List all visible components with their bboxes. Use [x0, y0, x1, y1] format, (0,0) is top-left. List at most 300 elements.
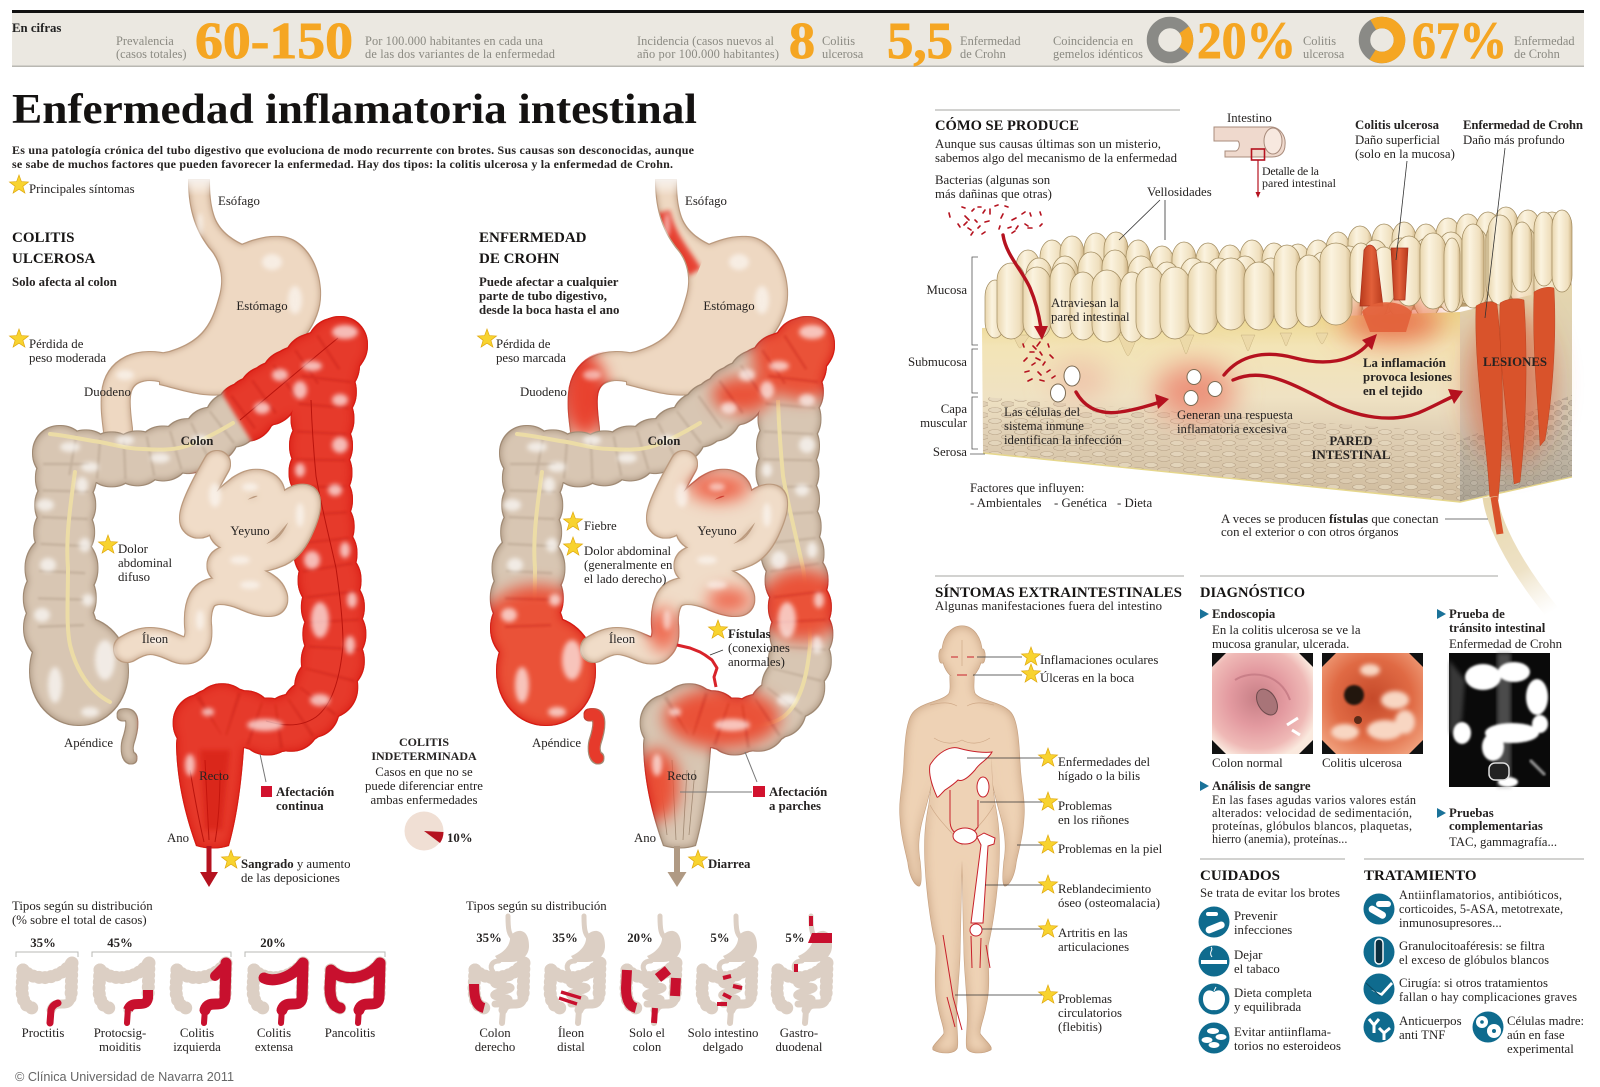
mini: colon derecho [474, 916, 529, 1023]
symptom: dolor abdominal [564, 537, 673, 586]
organ labels [520, 194, 755, 845]
crohn depth label: Daño más profundo [1463, 133, 1565, 147]
symptom: perdida de peso: Pérdida de [496, 337, 551, 351]
percentages: 35% [476, 931, 502, 945]
heading: CÓMO SE PRODUCE [935, 117, 1079, 134]
colitis depth label: (solo en la mucosa) [1355, 147, 1455, 161]
item: celulas madre: Células madre: [1507, 1014, 1584, 1028]
symptom: dolor abdominal: Dolor [118, 542, 149, 556]
heading [371, 735, 477, 763]
image captions: Colon normal [1212, 756, 1283, 770]
panel: como se produce [908, 110, 1583, 612]
image: colon normal [1212, 653, 1313, 754]
layer labels: Submucosa [908, 355, 967, 369]
item: evitar: torios no esteroideos [1234, 1039, 1341, 1053]
bacteria label [935, 173, 1052, 201]
factors: - Genética [1054, 496, 1107, 510]
captions: moiditis [99, 1040, 141, 1054]
description: Casos en que no se [375, 765, 473, 779]
crypts [1012, 333, 1328, 356]
icon: apple [1198, 984, 1230, 1014]
header band: en cifras [12, 10, 1584, 70]
heading: colitis ulcerosa: ULCEROSA [12, 251, 96, 267]
item: celulas madre [1507, 1014, 1584, 1056]
symptom: fiebre [564, 512, 617, 533]
organ labels: Íleon [142, 632, 169, 646]
analisis de sangre: alterados: velocidad de sedimentación, [1212, 806, 1412, 820]
prevalence label: (casos totales) [116, 47, 187, 61]
label enfermedad de crohn: de Crohn [1514, 47, 1560, 61]
symptom: dolor abdominal: Dolor abdominal [584, 544, 672, 558]
step labels: provoca lesiones [1363, 370, 1452, 384]
organ labels: Esófago [685, 194, 727, 208]
incidence label: año por 100.000 habitantes) [637, 47, 779, 61]
captions: Solo el [629, 1026, 665, 1040]
step labels: La inflamación [1363, 356, 1446, 370]
heading: CUIDADOS [1200, 868, 1280, 884]
analisis de sangre: En las fases agudas varios valores están [1212, 793, 1416, 807]
arrow: cells respond [1076, 392, 1169, 413]
arrow: to deep tissue [1233, 375, 1463, 418]
item: oseo: óseo (osteomalacia) [1058, 896, 1160, 910]
symptom: perdida de peso: Pérdida de [29, 337, 84, 351]
analisis de sangre: Análisis de sangre [1212, 779, 1311, 793]
mini: proctitis [22, 963, 72, 1023]
organ labels: Íleon [609, 632, 636, 646]
item: piel [1038, 835, 1163, 856]
symptom: dolor abdominal: abdominal [118, 556, 172, 570]
pruebas complementarias: TAC, gammagrafía... [1449, 835, 1557, 849]
item: prevenir: Prevenir [1234, 909, 1278, 923]
label colitis ulcerosa: Colitis [822, 34, 855, 48]
subtitle: Puede afectar a cualquier [479, 275, 619, 289]
step labels: inflamatoria excesiva [1177, 422, 1287, 436]
item: antiinflamatorios [1399, 888, 1563, 930]
step labels: sistema inmune [1004, 419, 1084, 433]
mini: colitis izquierda [176, 963, 226, 1023]
mini: gastroduodenal [777, 916, 832, 1023]
callout: afectacion a parches: a parches [769, 799, 821, 813]
percentages: 35% [30, 936, 56, 950]
prevalence label: Prevalencia [116, 34, 174, 48]
symptom: dolor abdominal: (generalmente en [584, 558, 673, 572]
panel: tipos colitis [12, 899, 385, 1054]
number 60-150: 60-150 [195, 13, 353, 70]
layer brackets [970, 257, 985, 454]
factors [970, 481, 1152, 510]
layer labels: Mucosa [926, 283, 967, 297]
organ labels: Esófago [218, 194, 260, 208]
step labels: Generan una respuesta [1177, 408, 1293, 422]
percentages: 20% [260, 936, 286, 950]
organ labels: Ano [634, 831, 656, 845]
item: dieta [1234, 986, 1312, 1014]
symptom: dolor abdominal: difuso [118, 570, 150, 584]
fistula note: con el exterior o con otros órganos [1221, 525, 1398, 539]
intestinal wall block [982, 207, 1572, 612]
label colitis ulcerosa [1303, 34, 1345, 61]
panel: tipos crohn [466, 899, 832, 1054]
caption [12, 899, 153, 927]
bacteria label: más dañinas que otras) [935, 187, 1052, 201]
intro text [12, 143, 695, 171]
item: antiinflamatorios: corticoides, 5-ASA, metotrexate, [1399, 902, 1563, 916]
donut 20% [1146, 16, 1194, 64]
item: anticuerpos: Anticuerpos [1399, 1014, 1462, 1028]
step labels: en el tejido [1363, 384, 1423, 398]
item: circulatorios [1038, 985, 1122, 1034]
intestine detail icon: pared intestinal [1262, 176, 1337, 190]
section rule [1200, 575, 1498, 577]
pruebas complementarias: Pruebas [1449, 806, 1494, 820]
item: boca [1022, 664, 1134, 685]
layer labels: muscular [920, 416, 968, 430]
facial features [951, 657, 974, 675]
layer labels: Capa [941, 402, 967, 416]
heading: INDETERMINADA [371, 749, 477, 763]
analisis de sangre [1200, 779, 1416, 846]
number 8: 8 [789, 13, 815, 70]
organ labels: Ano [167, 831, 189, 845]
symptom: dolor abdominal: el lado derecho) [584, 572, 666, 586]
intestine detail icon: Intestino [1227, 111, 1272, 125]
image captions: Colitis ulcerosa [1322, 756, 1402, 770]
subtitle: parte de tubo digestivo, [479, 289, 607, 303]
panel: enfermedad de crohn [478, 176, 834, 887]
symptom: diarrea: Diarrea [708, 857, 751, 871]
intro text: se sabe de muchos factores que pueden favorecer la enfermedad. Hay dos tipos: la colitis ulcerosa y la enfermedad de Crohn. [12, 157, 673, 171]
icon: stem cells [1472, 1012, 1504, 1042]
organ labels: Recto [199, 769, 229, 783]
label enfermedad de crohn: de Crohn [960, 47, 1006, 61]
inflammation glows [1052, 302, 1552, 463]
callout: afectacion a parches: Afectación [769, 785, 827, 799]
arrow: diarrhea [668, 846, 686, 887]
item: anticuerpos [1399, 1014, 1462, 1042]
organ labels: Apéndice [64, 736, 113, 750]
prueba de transito: Prueba de [1449, 607, 1505, 621]
intro: Aunque sus causas últimas son un misterio, [935, 137, 1161, 151]
section rule [1364, 858, 1584, 860]
item: dieta: Dieta completa [1234, 986, 1312, 1000]
symptom: fistulas: anormales) [728, 655, 785, 669]
section rule [935, 575, 1184, 577]
callout: afectacion a parches [680, 752, 827, 813]
endoscopia text [1200, 607, 1361, 651]
item: cirugia: Cirugía: si otros tratamientos [1399, 976, 1548, 990]
organ labels: Duodeno [520, 385, 567, 399]
mini: pancolitis [330, 963, 380, 1023]
callout: afectacion continua: Afectación [276, 785, 334, 799]
percentages: 5% [710, 931, 730, 945]
captions: Protocsig- [94, 1026, 146, 1040]
percentages: 45% [107, 936, 133, 950]
pie chart 10% [404, 812, 444, 850]
number 5,5: 5,5 [887, 13, 953, 70]
item: celulas madre: aún en fase [1507, 1028, 1565, 1042]
item: granulocitoaferesis [1399, 939, 1549, 967]
endoscopia text: En la colitis ulcerosa se ve la [1212, 623, 1361, 637]
donut 67% [1358, 16, 1406, 64]
label enfermedad de crohn: Enfermedad [960, 34, 1021, 48]
analisis de sangre: proteínas, glóbulos blancos, plaquetas, [1212, 819, 1412, 833]
percentages: 5% [785, 931, 805, 945]
icon: antibodies [1364, 1012, 1394, 1042]
percentages: 20% [627, 931, 653, 945]
step labels: pared intestinal [1051, 310, 1130, 324]
item: circulatorios: circulatorios [1058, 1006, 1122, 1020]
organ labels: Yeyuno [230, 524, 270, 538]
intestine detail icon: Detalle de la [1262, 164, 1320, 178]
symptom: sangrado: de las deposiciones [241, 871, 340, 885]
factors: - Dieta [1117, 496, 1152, 510]
colitis depth label [1355, 118, 1455, 260]
icon: test tube [1364, 936, 1394, 968]
step labels [1004, 296, 1547, 462]
symptom: perdida de peso [10, 329, 106, 365]
factors: Factores que influyen: [970, 481, 1084, 495]
prueba de transito: Enfermedad de Crohn [1449, 637, 1563, 651]
credit: © Clínica Universidad de Navarra 2011 [15, 1069, 234, 1084]
captions: duodenal [776, 1040, 823, 1054]
arrow: to mucosa [1224, 334, 1377, 375]
item: dieta: y equilibrada [1234, 1000, 1301, 1014]
heading: enfermedad de crohn: ENFERMEDAD [479, 230, 587, 246]
heading: DIAGNÓSTICO [1200, 584, 1305, 601]
symptom: sangrado: Sangrado y aumento [241, 857, 350, 871]
item: ocular [1022, 647, 1158, 667]
symptom: perdida de peso: peso marcada [496, 351, 566, 365]
crohn depth label: Enfermedad de Crohn [1463, 118, 1583, 132]
brackets [16, 952, 385, 957]
captions [475, 1026, 823, 1054]
shin [971, 936, 990, 968]
heading: colitis ulcerosa: COLITIS [12, 230, 75, 246]
caption: (% sobre el total de casos) [12, 913, 147, 927]
layer labels: Serosa [933, 445, 967, 459]
item: rinones: Problemas [1058, 799, 1112, 813]
femur and knee [971, 833, 995, 923]
label enfermedad de crohn [1514, 34, 1575, 61]
number 67%: 67% [1412, 13, 1507, 70]
captions: extensa [255, 1040, 294, 1054]
mini: solo el colon [626, 916, 681, 1023]
callout: afectacion continua [260, 754, 334, 813]
organ labels: Apéndice [532, 736, 581, 750]
immune cells [1050, 366, 1222, 406]
item: rinones: en los riñones [1058, 813, 1129, 827]
panel: colitis ulcerosa [10, 176, 367, 887]
intro [935, 137, 1178, 165]
endoscopia text: mucosa granular, ulcerada. [1212, 637, 1349, 651]
heading: COLITIS [399, 735, 449, 749]
captions [22, 1026, 375, 1054]
item: prevenir [1234, 909, 1292, 937]
muscular layer [983, 397, 1460, 502]
item: anticuerpos: anti TNF [1399, 1028, 1445, 1042]
item: evitar: Evitar antiinflama- [1234, 1025, 1331, 1039]
symptom: perdida de peso [478, 329, 566, 365]
section rule [1200, 858, 1345, 860]
heading: enfermedad de crohn: DE CROHN [479, 251, 560, 267]
bacteria label: Bacterias (algunas son [935, 173, 1051, 187]
panel: sintomas extraintestinales [900, 576, 1184, 1053]
item: prevenir: infecciones [1234, 923, 1292, 937]
heading: TRATAMIENTO [1364, 868, 1477, 884]
heading: enfermedad de crohn [479, 230, 587, 267]
vein [943, 935, 962, 1030]
item: artritis [1038, 919, 1129, 954]
label enfermedad de crohn [960, 34, 1021, 61]
item: higado: hígado o la bilis [1058, 769, 1140, 783]
knee joint [970, 924, 982, 936]
organ labels: Colon [181, 434, 213, 448]
item: celulas madre: experimental [1507, 1042, 1574, 1056]
symptom: dolor abdominal [98, 535, 172, 584]
heading: colitis ulcerosa [12, 230, 96, 267]
label: en cifras: En cifras [12, 21, 61, 35]
vellosidades label [1119, 185, 1212, 240]
prevalence note [365, 34, 556, 61]
wall front face [982, 312, 1460, 502]
symptom: perdida de peso: peso moderada [29, 351, 106, 365]
percentages [30, 936, 286, 950]
intro: sabemos algo del mecanismo de la enfermedad [935, 151, 1178, 165]
analisis de sangre: hierro (anemia), proteínas... [1212, 832, 1347, 846]
captions: Colon [479, 1026, 511, 1040]
heading: SÍNTOMAS EXTRAINTESTINALES [935, 584, 1182, 601]
fistula note: A veces se producen fístulas que conectan [1221, 512, 1439, 526]
mini: protocsigmoiditis [99, 963, 149, 1023]
step labels: LESIONES [1483, 355, 1547, 369]
captions: derecho [475, 1040, 515, 1054]
symptom: fiebre: Fiebre [584, 519, 617, 533]
item: circulatorios: (flebitis) [1058, 1020, 1102, 1034]
symptom: fistulas: Fístulas [728, 627, 771, 641]
item: artritis: articulaciones [1058, 940, 1129, 954]
mini: ileon distal [550, 916, 605, 1023]
symptom: fistulas: (conexiones [728, 641, 790, 655]
item: granulocitoaferesis: el exceso de glóbulos blancos [1399, 953, 1549, 967]
colitis depth label: Colitis ulcerosa [1355, 118, 1440, 132]
prevalence note: de las dos variantes de la enfermedad [365, 47, 556, 61]
caption: Tipos según su distribución [466, 899, 607, 913]
captions: Solo intestino [688, 1026, 758, 1040]
arrow: bacteria penetrate [1003, 235, 1048, 340]
colitis depth label: Daño superficial [1355, 133, 1440, 147]
villi back rows [1016, 207, 1564, 342]
item: ocular: Inflamaciones oculares [1040, 653, 1158, 667]
captions: izquierda [173, 1040, 221, 1054]
label colitis ulcerosa: ulcerosa [822, 47, 864, 61]
item: tabaco: Dejar [1234, 948, 1263, 962]
subtitle: Se trata de evitar los brotes [1200, 886, 1340, 900]
endoscopia text: Endoscopia [1212, 607, 1276, 621]
intestine detail icon [1214, 111, 1337, 198]
caption: Tipos según su distribución [12, 899, 153, 913]
liver [930, 748, 992, 797]
organ labels: Colon [648, 434, 680, 448]
symptom: sangrado [222, 850, 350, 885]
image: colitis ulcerosa [1322, 653, 1423, 754]
item: antiinflamatorios: inmunosupresores... [1399, 916, 1502, 930]
captions: colon [633, 1040, 662, 1054]
leader lines [955, 657, 1042, 995]
arrow: bleeding [200, 846, 218, 887]
item: antiinflamatorios: Antiinflamatorios, antibióticos, [1399, 888, 1562, 902]
percentages: 35% [552, 931, 578, 945]
item: oseo: Reblandecimiento [1058, 882, 1151, 896]
bladder [953, 828, 977, 844]
prueba de transito: tránsito intestinal [1449, 621, 1546, 635]
legend: principales sintomas: Principales síntomas [29, 182, 135, 196]
layer labels [908, 283, 968, 459]
item: artritis: Artritis en las [1058, 926, 1128, 940]
symptom: fistulas [708, 620, 790, 669]
kidney and colon outline [950, 790, 978, 834]
captions: distal [557, 1040, 585, 1054]
symptom: diarrea [688, 850, 751, 871]
incidence label: Incidencia (casos nuevos al [637, 34, 775, 48]
crohn depth label [1463, 118, 1583, 318]
label colitis ulcerosa [822, 34, 864, 61]
item: higado: Enfermedades del [1058, 755, 1150, 769]
description: puede diferenciar entre [365, 779, 483, 793]
ulcerated villi [1360, 245, 1412, 332]
captions: Proctitis [22, 1026, 64, 1040]
value 10%: 10% [447, 831, 473, 845]
prueba de transito [1437, 607, 1563, 651]
serosa edge [983, 453, 1572, 502]
item: higado [1038, 748, 1150, 783]
panel: colitis indeterminada [365, 735, 483, 850]
number 20%: 20% [1197, 13, 1296, 70]
item: tabaco: el tabaco [1234, 962, 1280, 976]
organ labels: Recto [667, 769, 697, 783]
panel: diagnostico [1200, 576, 1563, 849]
incidence label [637, 34, 779, 61]
x-ray image [1449, 653, 1550, 787]
digestive illustration [30, 176, 367, 848]
percentages [476, 931, 805, 945]
icon: scalpel [1364, 974, 1394, 1004]
kidney [977, 777, 989, 797]
item: granulocitoaferesis: Granulocitoaféresis: se filtra [1399, 939, 1545, 953]
vellosidades label: Vellosidades [1147, 185, 1212, 199]
mini: solo intestino delgado [702, 916, 757, 1023]
organ labels: Estómago [236, 299, 288, 313]
fistula [677, 645, 717, 687]
title: Enfermedad inflamatoria intestinal [12, 87, 697, 133]
label colitis ulcerosa: Colitis [1303, 34, 1336, 48]
captions: Colitis [257, 1026, 291, 1040]
section rule [935, 109, 1180, 111]
factors: - Ambientales [970, 496, 1041, 510]
organ labels: Duodeno [84, 385, 131, 399]
legend: principales sintomas [10, 175, 135, 196]
step labels: identifican la infección [1004, 433, 1123, 447]
intro text: Es una patología crónica del tubo digestivo que evoluciona de modo recurrente con brotes. Sus causas son desconocidas, aunque [12, 143, 695, 157]
label colitis ulcerosa: ulcerosa [1303, 47, 1345, 61]
twins label [1053, 34, 1143, 61]
pruebas complementarias [1437, 806, 1557, 849]
subtitle [479, 275, 619, 317]
image captions [1212, 756, 1402, 770]
step labels: PARED [1329, 434, 1373, 448]
captions: delgado [703, 1040, 743, 1054]
item: circulatorios: Problemas [1058, 992, 1112, 1006]
digestive illustration [497, 176, 834, 848]
